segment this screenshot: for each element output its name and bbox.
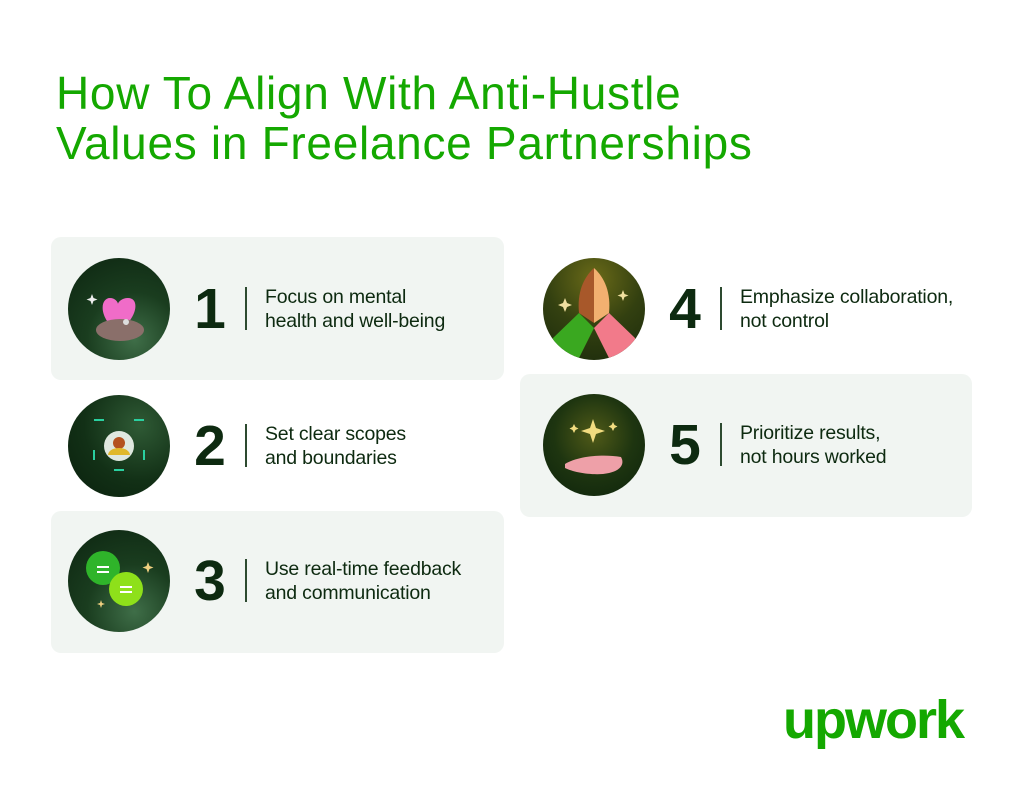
item 2: 2	[194, 414, 226, 478]
title: Values in Freelance Partnerships	[56, 117, 753, 169]
item 1: Focus on mental	[265, 286, 406, 308]
icon: heart in hand	[68, 258, 170, 360]
panel: item 5 background	[520, 374, 972, 517]
item 4: not control	[740, 310, 829, 332]
item 5: not hours worked	[740, 446, 886, 468]
item 1: 1	[194, 277, 226, 341]
item 3	[68, 530, 462, 632]
item 2: Set clear scopes	[265, 423, 406, 445]
item 1	[68, 258, 445, 360]
icon: high five hands	[543, 258, 645, 360]
item 5	[543, 394, 886, 496]
item 1: health and well-being	[265, 310, 445, 332]
item 3: Use real-time feedback	[265, 558, 461, 580]
item 2	[68, 395, 406, 497]
item 2: and boundaries	[265, 447, 397, 469]
item 3: and communication	[265, 582, 431, 604]
item 4	[543, 258, 953, 360]
icon: chat bubbles	[68, 530, 170, 632]
item 3: 3	[194, 549, 226, 613]
item 5: Prioritize results,	[740, 422, 880, 444]
item 4: Emphasize collaboration,	[740, 286, 953, 308]
item 4: 4	[669, 277, 701, 341]
panel: item 3 background	[51, 511, 504, 653]
logo: upwork: upwork	[783, 690, 963, 750]
title: How To Align With Anti-Hustle	[56, 67, 681, 119]
item 5: 5	[669, 413, 701, 477]
title	[56, 67, 753, 169]
icon: profile frame	[68, 395, 170, 497]
panel: item 1 background	[51, 237, 504, 380]
icon: hand with stars	[543, 394, 645, 496]
